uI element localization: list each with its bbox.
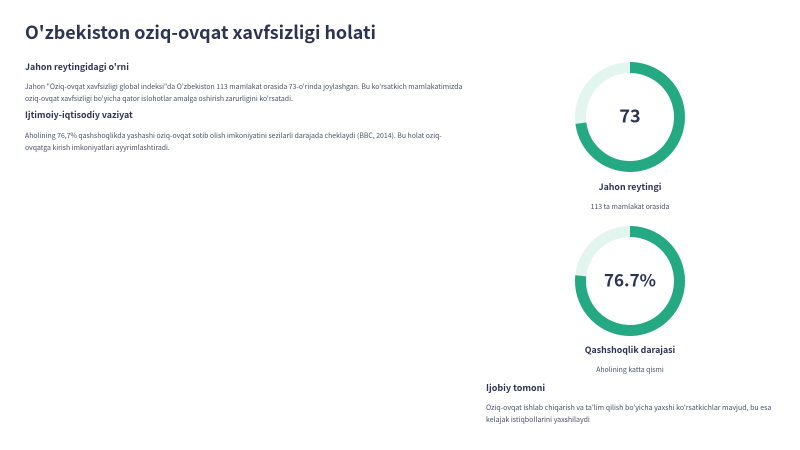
chart: poverty donut: 76.7%	[604, 266, 656, 292]
sublabel: poverty: Aholining katta qismi	[596, 364, 664, 374]
paragraph: socio-economic: Aholining 76,7% qashshoqlikda yashashi oziq-ovqat sotib olish imkoniyatini sezilarli darajada cheklaydi (BBC, 2014). Bu holat oziq-	[25, 130, 442, 140]
paragraph: positive side: Oziq-ovqat ishlab chiqarish va ta'lim qilish bo'yicha yaxshi ko'rsatkichlar mavjud, bu esa	[486, 403, 771, 413]
heading: socio-economic: Ijtimoiy-iqtisodiy vaziyat	[25, 108, 133, 121]
heading: global ranking: Jahon reytingidagi o'rni	[25, 60, 129, 73]
paragraph: global ranking	[25, 81, 462, 103]
panel: global ranking text	[25, 60, 462, 103]
label: poverty: Qashshoqlik darajasi	[585, 343, 675, 356]
paragraph: socio-economic: ovqatga kirish imkoniyatlari ayyrimlashtiradi.	[25, 142, 170, 152]
paragraph: global ranking: oziq-ovqat xavfsizligi bo'yicha qator islohotlar amalga oshirish zarurligini ko'rsatadi.	[25, 93, 293, 103]
title: O'zbekiston oziq-ovqat xavfsizligi holati	[25, 19, 376, 45]
chart: ranking donut: 73	[619, 102, 641, 128]
paragraph: positive side	[486, 403, 771, 425]
heading: positive side: Ijobiy tomoni	[486, 381, 545, 394]
chart: ranking donut	[575, 62, 685, 172]
paragraph: positive side: kelajak istiqbollarini yaxshilaydi	[486, 415, 590, 425]
panel: positive side	[486, 381, 771, 425]
paragraph: global ranking: Jahon "Oziq-ovqat xavfsizligi global indeksi"da O'zbekiston 113 mamlakat orasida 73-o'rinda joylashgan. Bu ko'rsatkich mamlakatimizda	[25, 81, 462, 91]
panel: socio-economic text	[25, 108, 442, 152]
paragraph: socio-economic	[25, 130, 442, 152]
chart: poverty donut	[575, 226, 685, 336]
label: ranking: Jahon reytingi	[599, 180, 661, 193]
sublabel: ranking: 113 ta mamlakat orasida	[591, 201, 669, 211]
